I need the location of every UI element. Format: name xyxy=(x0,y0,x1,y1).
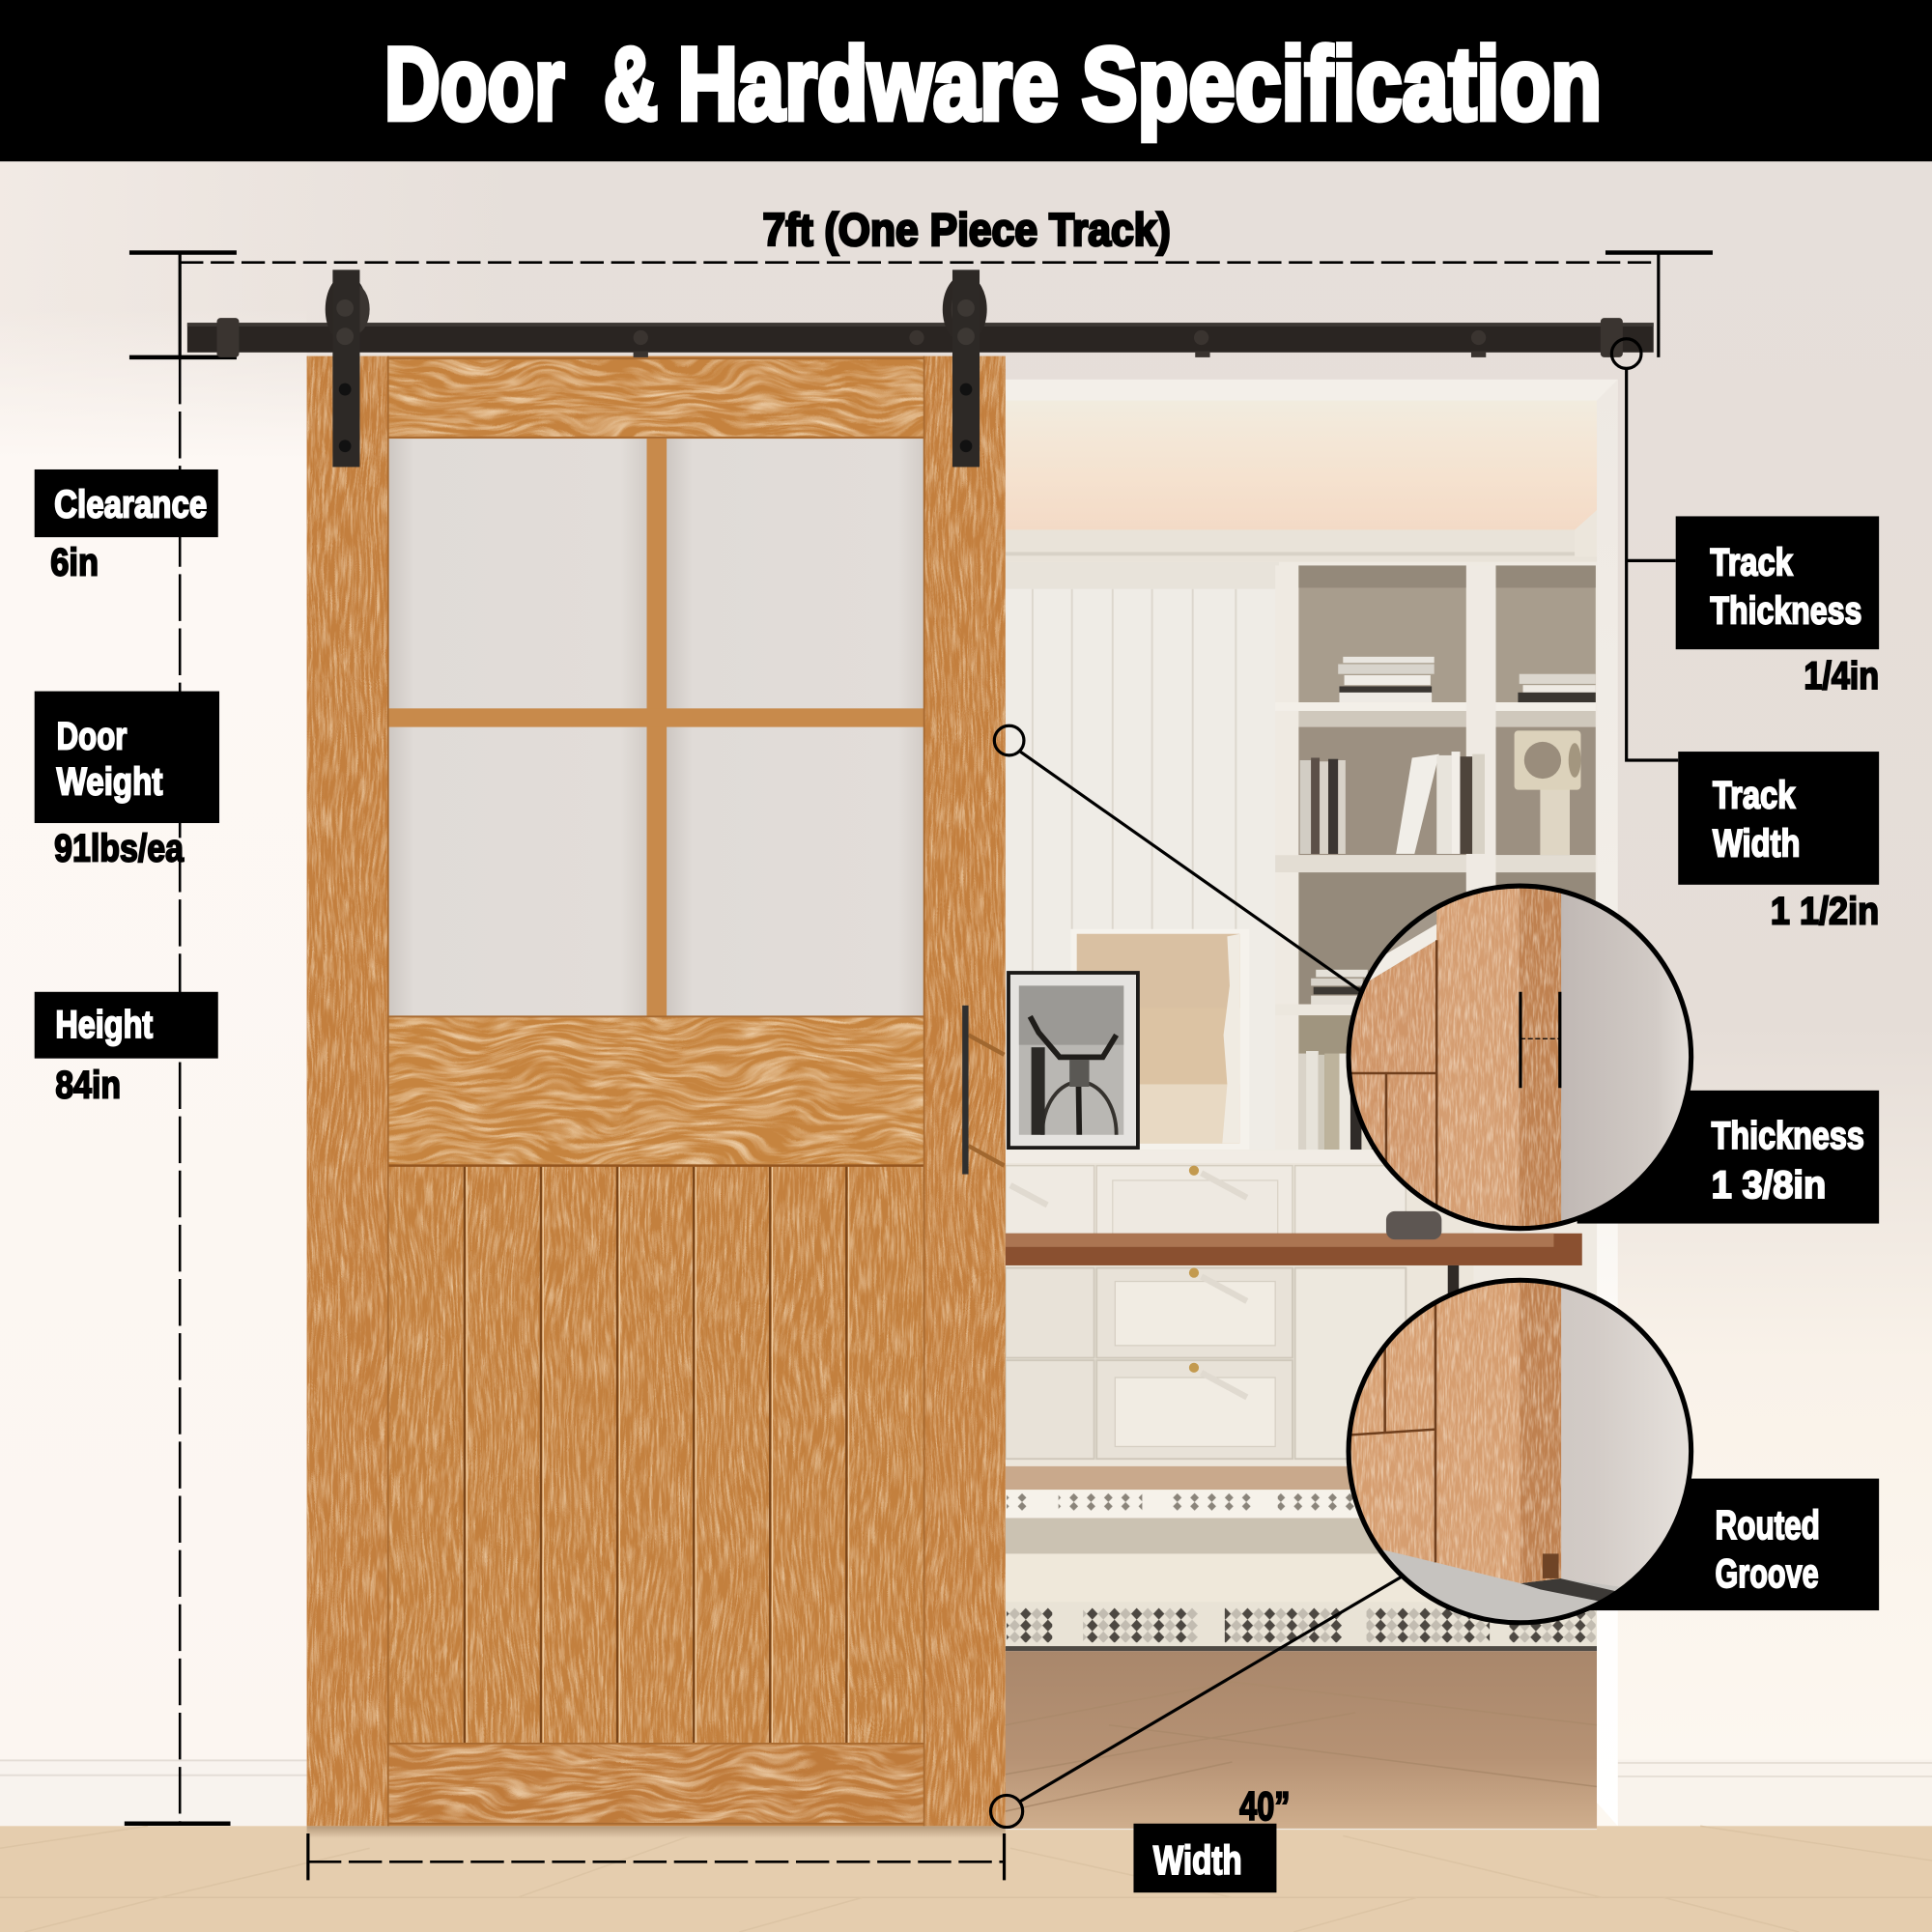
hanger strap left xyxy=(326,270,370,467)
crown moulding xyxy=(1006,510,1597,562)
label: width: 40” xyxy=(1239,1783,1290,1829)
leader line to routed groove detail xyxy=(991,1577,1401,1828)
label: width: Width xyxy=(1153,1837,1242,1883)
framed art xyxy=(1070,929,1249,1150)
label: door weight xyxy=(35,692,219,870)
header bar and title: Hardware Specification xyxy=(678,26,1602,142)
dimension line: width xyxy=(308,1833,1005,1880)
magnified detail: routed groove xyxy=(1347,1277,1694,1625)
label: track width: Width xyxy=(1713,822,1801,865)
baseboards xyxy=(0,1759,1932,1826)
track bolts xyxy=(634,330,1486,357)
dimension line and label: 7ft track length: 7ft (One Piece Track) xyxy=(763,205,1171,256)
header bar and title: & xyxy=(604,26,658,142)
table with cup xyxy=(1006,1211,1582,1295)
label: height: Height xyxy=(55,1004,153,1046)
header bar and title: Door xyxy=(384,26,564,142)
label: track thickness: Thickness xyxy=(1710,589,1861,632)
sliding barn door xyxy=(307,356,1006,1826)
plank seams xyxy=(388,1166,924,1744)
thickness marker xyxy=(1520,992,1560,1088)
label: clearance: 6in xyxy=(50,542,99,584)
leader line to thickness detail xyxy=(994,725,1365,994)
cabinets xyxy=(1006,1150,1474,1466)
label: track width xyxy=(1678,752,1879,933)
label: clearance: Clearance xyxy=(54,484,207,526)
label: door weight: Door xyxy=(57,716,127,758)
wood grain xyxy=(307,356,1006,1826)
header bar and title xyxy=(0,0,1932,161)
clearance and height dimension brackets xyxy=(125,252,1713,1824)
sculpture xyxy=(1515,730,1580,855)
glass panes xyxy=(388,439,924,1016)
door handle xyxy=(962,1006,1005,1175)
interior room seen through the doorway xyxy=(1006,401,1597,1830)
door trim xyxy=(1006,380,1618,1826)
label box: thickness: Thickness xyxy=(1712,1115,1864,1157)
label box: routed groove xyxy=(1577,1479,1879,1610)
framed bicycle photo xyxy=(1007,971,1140,1150)
label: door weight: Weight xyxy=(57,761,162,804)
label box: routed groove: Routed xyxy=(1716,1502,1820,1548)
shelving unit xyxy=(1275,565,1596,1158)
planks base xyxy=(388,1166,924,1745)
label: height: 84in xyxy=(55,1064,121,1106)
books xyxy=(1298,657,1596,1150)
label box: thickness xyxy=(1577,1091,1879,1224)
panelled wall xyxy=(1006,562,1279,1158)
label: track thickness: 1/4in xyxy=(1804,655,1879,697)
ceiling glow xyxy=(1006,401,1597,529)
label: door weight: 91lbs/ea xyxy=(54,828,185,870)
top rail xyxy=(388,358,924,438)
label: track width: Track xyxy=(1713,775,1796,817)
label: track thickness xyxy=(1676,516,1879,697)
floor xyxy=(0,1826,1932,1932)
barn door track xyxy=(187,318,1654,357)
label: clearance xyxy=(35,469,218,584)
bottom rail xyxy=(388,1744,924,1824)
label: width xyxy=(1133,1783,1290,1892)
label box: thickness: 1 3/8in xyxy=(1712,1164,1826,1207)
floor and rug xyxy=(1006,1466,1597,1829)
label: track thickness: Track xyxy=(1710,542,1794,584)
hanger strap right xyxy=(943,270,987,467)
mullions xyxy=(388,439,924,1016)
middle rail xyxy=(388,1016,924,1166)
stile and rail seams xyxy=(388,356,924,1826)
magnified detail: door thickness xyxy=(1343,881,1700,1238)
label: track width: 1 1/2in xyxy=(1771,891,1879,933)
track stops xyxy=(216,318,1623,357)
label: height xyxy=(35,992,218,1106)
label box: routed groove: Groove xyxy=(1716,1550,1819,1596)
callout leader lines for track xyxy=(1611,339,1678,760)
